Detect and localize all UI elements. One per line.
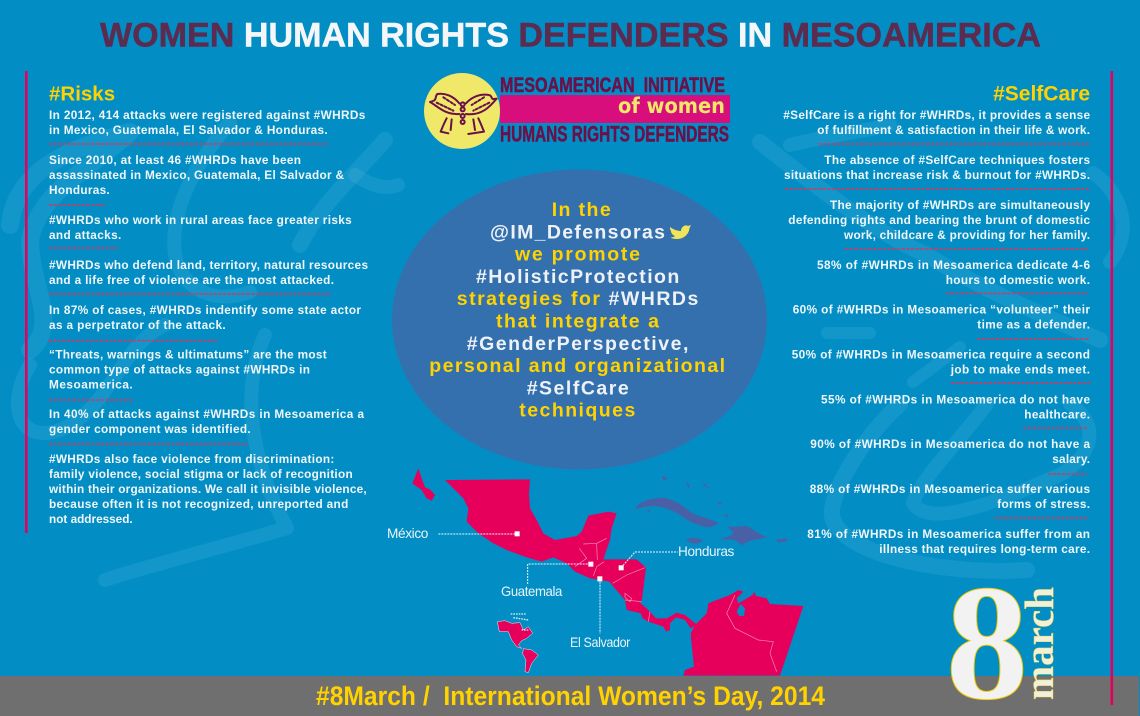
stat: 60 percent: time as a defender. xyxy=(977,318,1090,332)
map: mexico and central america xyxy=(412,468,697,632)
central ellipse xyxy=(392,170,767,470)
map labels: Guatemala xyxy=(501,583,563,599)
central message: #HolisticProtection xyxy=(476,266,679,288)
left accent line xyxy=(25,71,28,533)
risk: gender component: gender component was identified. xyxy=(49,422,251,436)
stat: 58 percent: hours to domestic work. xyxy=(946,273,1090,287)
self care: a right: of fulfillment & satisfaction in their life & work. xyxy=(817,123,1090,137)
map: el salvador pointer xyxy=(598,579,601,633)
map: guatemala pointer xyxy=(528,564,591,585)
stat: 58 percent xyxy=(817,258,1090,287)
central message xyxy=(429,199,725,422)
risk: state actor xyxy=(49,303,361,332)
risk: attacks registered xyxy=(49,108,366,137)
stat: 50 percent xyxy=(792,348,1090,376)
stat: 55 percent: healthcare. xyxy=(1024,408,1090,422)
central message: @IM_Defensoras xyxy=(490,222,665,244)
self care: majority: The majority of #WHRDs are simultaneously xyxy=(830,198,1090,212)
risk: invisible violence xyxy=(48,452,367,526)
stat: 60 percent xyxy=(793,302,1090,332)
risk: assassinated: Honduras. xyxy=(49,183,110,197)
stat: 81 percent xyxy=(807,527,1090,556)
panel: risks xyxy=(48,82,368,526)
right accent line xyxy=(1110,71,1113,705)
central message: techniques xyxy=(519,400,635,422)
heading: risks: #Risks xyxy=(49,82,115,106)
risk: threats: “Threats, warnings & ultimatums” are the most xyxy=(49,348,327,362)
central message: that integrate a xyxy=(496,310,659,332)
risk: gender component xyxy=(49,407,364,436)
stat: 88 percent: forms of stress. xyxy=(997,497,1090,511)
stat: 50 percent: 50% of #WHRDs in Mesoamerica require a second xyxy=(792,348,1090,362)
logo circle with butterfly xyxy=(424,73,500,149)
icon: twitter bird xyxy=(670,225,691,239)
footer band xyxy=(0,676,1139,716)
logo line two: HUMANS RIGHTS DEFENDERS xyxy=(500,122,729,146)
risk: state actor: as a perpetrator of the attack. xyxy=(49,318,226,332)
map labels xyxy=(387,525,734,650)
central message: strategies for #WHRDs xyxy=(457,288,699,310)
stat: 81 percent: 81% of #WHRDs in Mesoamerica suffer from an xyxy=(807,527,1090,541)
stat: 88 percent: 88% of #WHRDs in Mesoamerica suffer various xyxy=(810,482,1090,496)
map: south america xyxy=(683,590,803,676)
map xyxy=(387,468,803,676)
map labels: El Salvador xyxy=(570,634,631,650)
risk: state actor: In 87% of cases, #WHRDs indentify some state actor xyxy=(49,303,361,317)
logo xyxy=(424,73,730,149)
self care: majority xyxy=(788,198,1090,242)
risk: land defenders: #WHRDs who defend land, territory, natural resources xyxy=(49,258,368,272)
logo of women: of women xyxy=(618,94,725,118)
risk: assassinated: Since 2010, at least 46 #WHRDs have been xyxy=(49,153,301,167)
map: mexico pointer xyxy=(438,532,517,535)
badge: 8 march: march xyxy=(1016,587,1062,700)
central message: we promote xyxy=(514,244,640,266)
risk: rural areas xyxy=(49,213,352,242)
map: honduras pointer xyxy=(621,552,678,568)
risk: rural areas: and attacks. xyxy=(49,228,121,242)
logo line one: MESOAMERICAN INITIATIVE xyxy=(500,74,725,97)
risk: attacks registered: In 2012, 414 attacks were registered against #WHRDs xyxy=(49,108,366,122)
stat: 90 percent: salary. xyxy=(1052,452,1090,466)
risk: assassinated: assassinated in Mexico, Guatemala, El Salvador & xyxy=(49,168,344,182)
risk: invisible violence: family violence, social stigma or lack of recognition xyxy=(49,467,353,481)
panel: self care xyxy=(783,82,1090,556)
footer text: #8March / International Women’s Day, 2014 xyxy=(316,681,825,711)
self care: absence: situations that increase risk & burnout for #WHRDs. xyxy=(784,168,1090,182)
central message: #SelfCare xyxy=(527,378,629,400)
logo pink bar xyxy=(500,95,730,123)
title: WOMEN HUMAN RIGHTS DEFENDERS IN MESOAMERICA xyxy=(100,16,1041,54)
self care: majority: work, childcare & providing for her family. xyxy=(843,228,1090,242)
stat: 55 percent: 55% of #WHRDs in Mesoamerica do not have xyxy=(821,392,1090,406)
self care: absence xyxy=(784,153,1090,182)
self care: absence: The absence of #SelfCare techniques fosters xyxy=(824,153,1090,167)
self care: majority: defending rights and bearing the brunt of domestic xyxy=(788,213,1090,227)
map: caribbean islands xyxy=(635,475,788,546)
risk: gender component: In 40% of attacks against #WHRDs in Mesoamerica a xyxy=(49,407,364,421)
stat: 55 percent xyxy=(821,392,1090,422)
central message: #GenderPerspective, xyxy=(467,333,688,355)
stat: 50 percent: job to make ends meet. xyxy=(950,362,1090,376)
map: mini americas locator xyxy=(497,614,538,673)
central message: personal and organizational xyxy=(429,355,725,377)
risk: assassinated xyxy=(49,153,344,197)
heading: self care: #SelfCare xyxy=(993,82,1090,106)
risk: invisible violence: #WHRDs also face violence from discrimination: xyxy=(49,452,334,466)
central message: In the xyxy=(552,199,611,221)
map labels: México xyxy=(387,525,429,541)
stat: 60 percent: 60% of #WHRDs in Mesoamerica “volunteer” their xyxy=(793,302,1090,316)
stat: 88 percent xyxy=(810,482,1090,511)
risk: threats xyxy=(49,348,327,392)
risk: rural areas: #WHRDs who work in rural areas face greater risks xyxy=(49,213,352,227)
stat: 81 percent: illness that requires long-term care. xyxy=(879,542,1090,556)
map labels: Honduras xyxy=(678,543,734,559)
stat: 90 percent xyxy=(810,437,1090,466)
risk: invisible violence: within their organizations. We call it invisible violence, xyxy=(48,482,367,496)
risk: attacks registered: in Mexico, Guatemala, El Salvador & Honduras. xyxy=(49,123,328,137)
stat: 58 percent: 58% of #WHRDs in Mesoamerica dedicate 4-6 xyxy=(817,258,1090,272)
self care: a right xyxy=(783,108,1090,137)
risk: threats: common type of attacks against #WHRDs in xyxy=(49,362,310,376)
risk: invisible violence: because often it is not recognized, unreported and xyxy=(49,497,348,511)
risk: threats: Mesoamerica. xyxy=(49,378,133,392)
risk: invisible violence: not addressed. xyxy=(49,512,133,526)
risk: land defenders: and a life free of violence are the most attacked. xyxy=(49,273,334,287)
self care: a right: #SelfCare is a right for #WHRDs, it provides a sense xyxy=(783,108,1090,122)
risk: land defenders xyxy=(49,258,368,287)
stat: 90 percent: 90% of #WHRDs in Mesoamerica do not have a xyxy=(810,437,1090,451)
